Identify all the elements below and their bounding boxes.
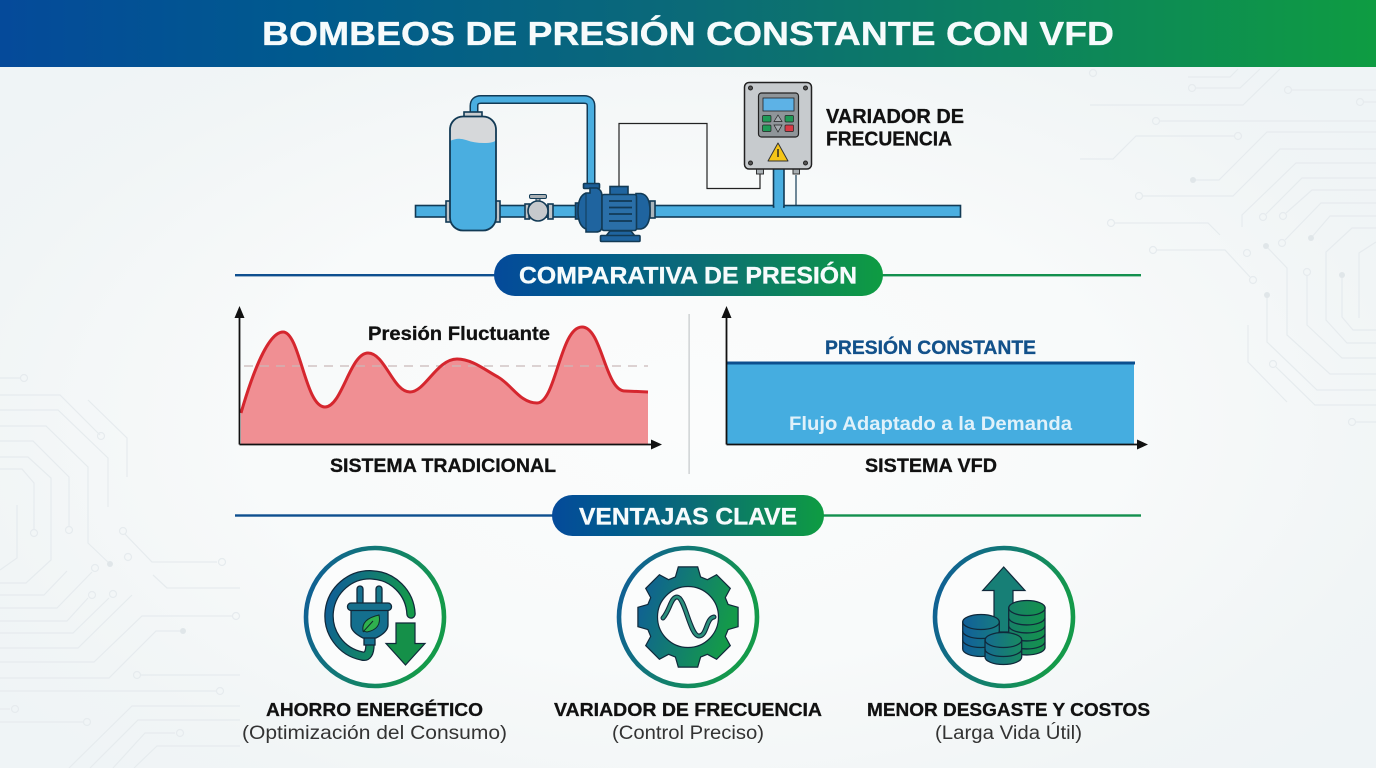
title: BOMBEOS DE PRESIÓN CONSTANTE CON VFD: [262, 15, 1114, 52]
advantage: energy saving: [242, 548, 507, 744]
icon: gear with sine wave: [619, 548, 757, 686]
fluctuating area: [241, 327, 648, 444]
advantage: frequency drive: [554, 548, 822, 744]
control wire: [619, 124, 760, 188]
cabinet label: FRECUENCIA: [826, 128, 952, 150]
tank: [446, 112, 500, 230]
header banner: [0, 0, 1376, 67]
chart: traditional system: [234, 306, 662, 477]
section heading: ventajas: VENTAJAS CLAVE: [579, 504, 797, 530]
chart caption: SISTEMA VFD: [865, 456, 997, 477]
section heading: comparativa: [235, 254, 1141, 296]
frequency drive cabinet: [744, 82, 812, 174]
label: AHORRO ENERGÉTICO: [266, 699, 483, 720]
sublabel: (Optimización del Consumo): [242, 723, 507, 744]
pump and motor: [576, 184, 655, 242]
chart caption: SISTEMA TRADICIONAL: [330, 456, 556, 477]
curve label: Presión Fluctuante: [368, 323, 550, 345]
icon: plug with leaf and down arrow: [306, 548, 444, 686]
axes: [240, 312, 656, 444]
axes: [726, 312, 1142, 444]
sublabel: (Larga Vida Útil): [935, 722, 1082, 744]
return pipe loop: [474, 100, 591, 184]
constant flow area: [727, 363, 1134, 444]
label: VARIADOR DE FRECUENCIA: [554, 699, 822, 720]
icon: coins with up arrow: [935, 548, 1073, 686]
section heading: comparativa: COMPARATIVA DE PRESIÓN: [519, 262, 857, 290]
area label: Flujo Adaptado a la Demanda: [789, 413, 1072, 435]
cabinet label: VARIADOR DE: [826, 106, 964, 128]
cabinet label: [826, 106, 964, 150]
constant pressure line: [727, 362, 1135, 364]
main pipe: [416, 168, 960, 217]
section heading: ventajas: [235, 495, 1141, 536]
advantage: lower wear and cost: [867, 548, 1150, 744]
divider: [688, 314, 690, 474]
sublabel: (Control Preciso): [612, 723, 764, 744]
line label: PRESIÓN CONSTANTE: [825, 337, 1036, 359]
label: MENOR DESGASTE Y COSTOS: [867, 699, 1150, 720]
chart: VFD system: [722, 306, 1148, 477]
fluctuating curve: [241, 327, 648, 413]
pump system diagram: [416, 82, 964, 242]
valve: [525, 194, 553, 221]
